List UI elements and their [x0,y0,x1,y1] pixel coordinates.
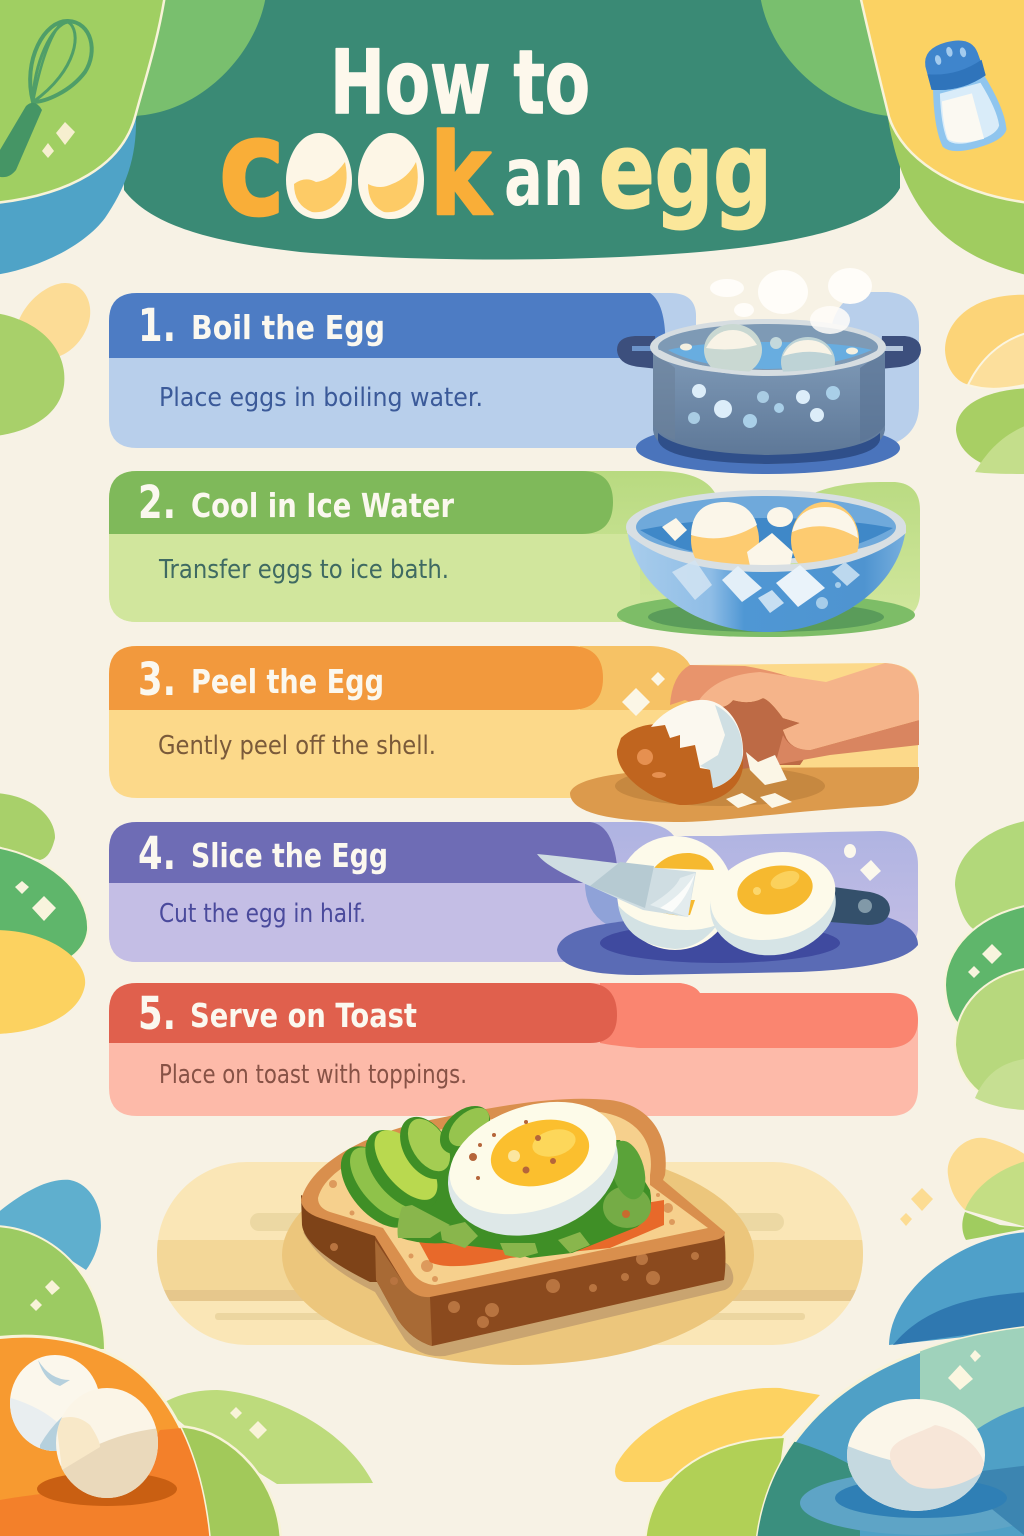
right side blobs upper [945,295,1024,474]
heading band [109,293,665,358]
egg half [431,1083,635,1257]
title word: cook with egg letters: k [430,111,493,241]
toast crumb [318,1111,708,1285]
boiling eggs [704,324,835,372]
step 4 description: Cut the egg in half. [159,899,366,929]
step 5 panel [109,983,918,1116]
top-left corner shapes [0,0,266,275]
heading band [109,983,617,1043]
sparkles [844,844,856,858]
back egg half [617,836,733,950]
panel body [109,822,918,962]
mat under toast [150,1145,870,1365]
step 2 panel [109,471,920,622]
toast shadow [303,1232,733,1356]
steam [710,268,872,334]
bottom-left corner shapes [0,1180,373,1536]
panel body [109,983,918,1116]
step 1 number: 1. [138,299,176,352]
title line: How to: How to [330,31,590,134]
heading band [109,822,618,883]
toast left side [301,1195,378,1282]
avocado slices [326,1096,499,1241]
egg shell [617,724,743,805]
avocado base [398,1140,651,1258]
front egg half [704,847,842,963]
left side blobs middle [0,793,88,1034]
icon: egg on blue hill [845,1399,985,1515]
heading band [109,471,613,534]
step 2 heading: Cool in Ice Water [191,486,455,525]
title word: cook with egg letters: o [358,81,424,251]
step 5 heading: Serve on Toast [190,996,417,1035]
title [219,31,772,251]
panel body [109,292,919,448]
top-right corner shapes [760,0,1024,276]
illustration: hand peeling egg [570,663,919,822]
step 3 panel [109,646,918,798]
heading band [109,646,603,710]
tomato layer [418,1200,664,1266]
illustration: ice bath bowl [617,490,915,637]
knife blade [537,854,696,917]
title word: egg: egg [599,110,772,232]
icon: whisk [0,21,92,177]
toast top crust [301,1099,725,1297]
step 1 heading: Boil the Egg [191,308,385,347]
cutting board [570,767,919,822]
step 4 number: 4. [138,827,176,880]
step 1 panel [109,292,919,448]
illustration: knife and sliced egg [537,836,918,975]
title word: cook with egg letters: o [286,81,352,251]
step 3 description: Gently peel off the shell. [158,731,436,761]
illustration: avocado toast with egg [301,1082,733,1356]
icon: salt shaker [916,33,1010,157]
title word: cook with egg letters [219,81,493,251]
illustration: boiling pot [617,268,921,474]
step 5 number: 5. [138,987,176,1040]
icon: two eggs on orange hill [0,1355,160,1500]
step 3 heading: Peel the Egg [191,662,384,701]
shell pieces [622,688,650,716]
knife handle [696,868,890,925]
plate [557,915,918,975]
step 3 number: 3. [138,653,176,706]
peeled egg white [651,700,743,788]
step 2 description: Transfer eggs to ice bath. [158,555,449,585]
step 4 panel [109,822,918,962]
avocado chunks [398,1205,450,1238]
title word: cook with egg letters: c [219,90,285,246]
panel body [109,471,920,622]
panel body [109,646,918,798]
header banner [120,0,900,259]
step 4 heading: Slice the Egg [191,836,388,875]
right side blobs middle [945,820,1024,1110]
bottom-right corner shapes [615,1138,1024,1536]
step 5 description: Place on toast with toppings. [159,1060,467,1090]
step 2 number: 2. [138,476,176,529]
hand [670,665,800,705]
step 1 description: Place eggs in boiling water. [159,383,483,413]
toast front side [375,1232,726,1346]
title word: an: an [504,130,584,225]
left side blobs upper [0,283,90,436]
